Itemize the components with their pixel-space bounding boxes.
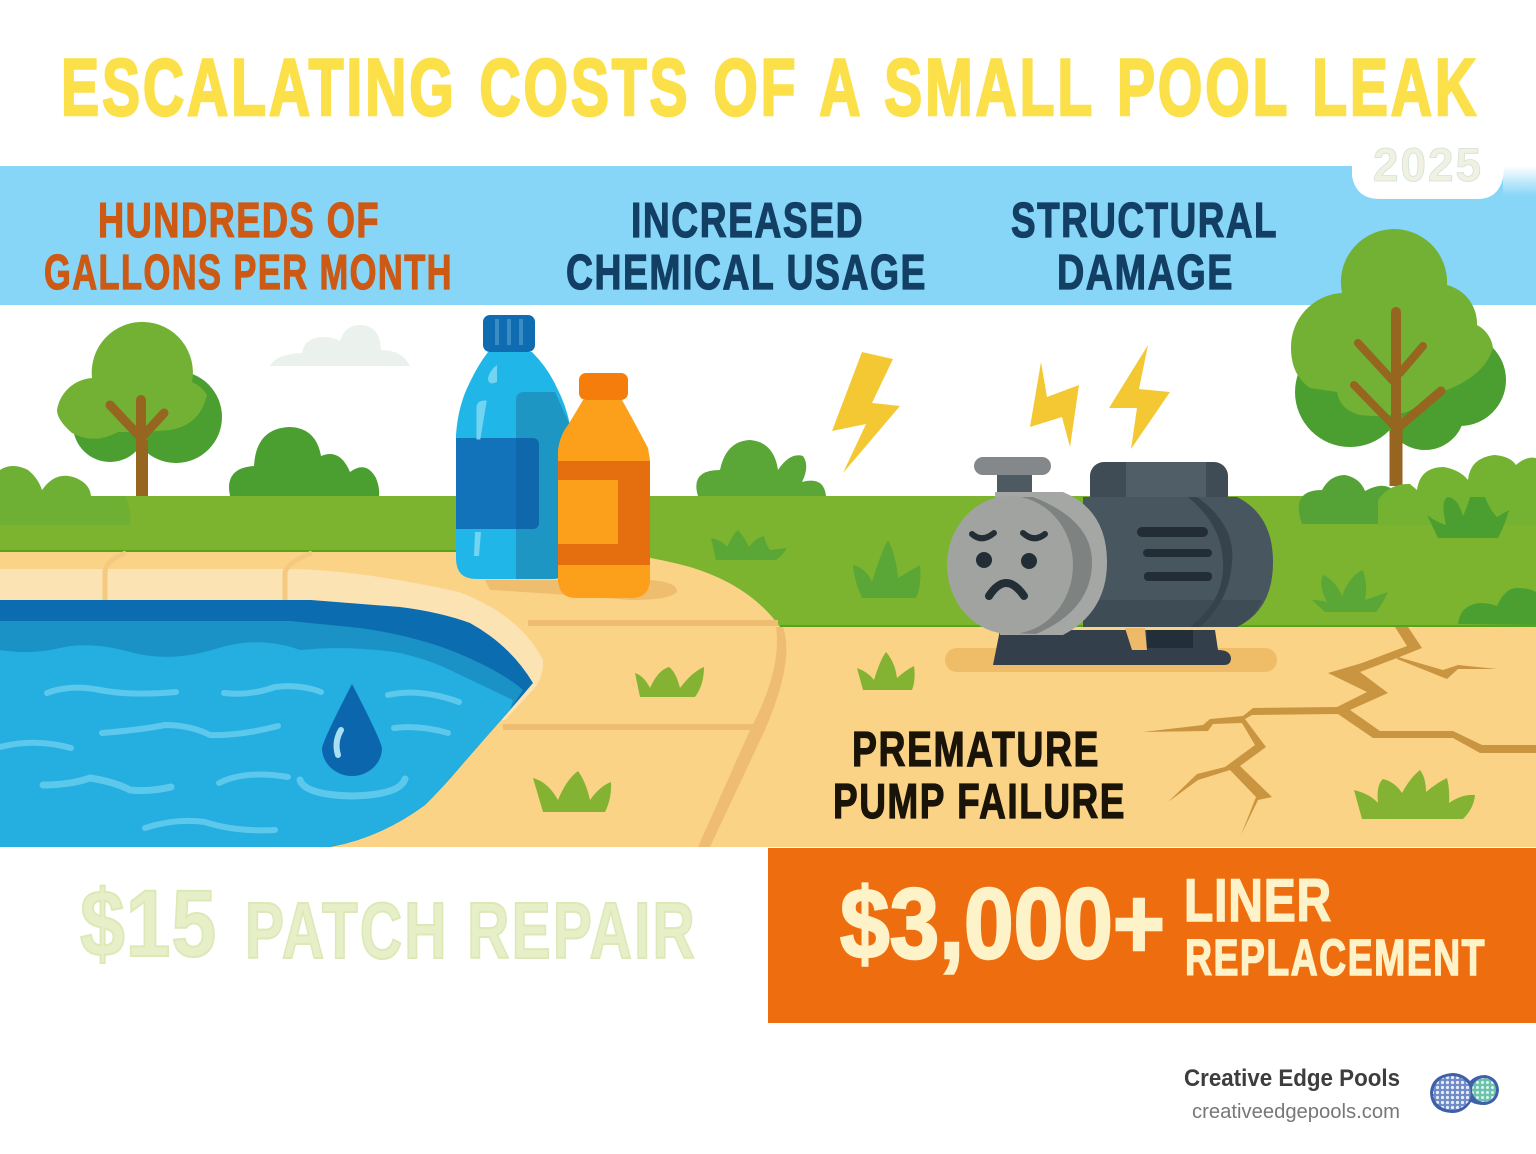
icon: grass tufts — [533, 530, 1536, 819]
year tab — [1352, 138, 1505, 199]
heading: hundreds of gallons — [44, 194, 453, 300]
panel: 3000 dollar liner replacement — [768, 848, 1536, 1023]
heading: increased chemical usage — [566, 194, 927, 300]
panel: 3000 dollar liner replacement: LINER — [1184, 867, 1332, 934]
icon: blue chemical bottle — [456, 315, 570, 579]
heading: structural damage: DAMAGE — [1057, 246, 1234, 300]
icon: lightning bolts over pump — [1030, 345, 1170, 449]
deck: sand ground — [0, 550, 1536, 847]
panel: 3000 dollar liner replacement: $3,000+ — [840, 868, 1165, 980]
tuft: grass back right — [1427, 497, 1509, 538]
icon: bottle shadow — [485, 580, 677, 600]
heading: hundreds of gallons: GALLONS PER MONTH — [44, 246, 453, 300]
icon: brand logo — [1430, 1073, 1499, 1113]
bushes — [0, 427, 1536, 525]
cloud — [270, 325, 410, 366]
tree: right — [1291, 229, 1506, 486]
heading: increased chemical usage: INCREASED — [631, 194, 864, 248]
footer brand text — [1184, 1065, 1400, 1123]
icon: lightning bolt left — [832, 352, 900, 473]
heading: hundreds of gallons: HUNDREDS OF — [98, 194, 380, 248]
icon: sad pool pump — [947, 457, 1273, 665]
footer brand text: Creative Edge Pools — [1184, 1065, 1400, 1092]
year tab: 2025 — [1373, 138, 1483, 191]
callout: 15 dollar patch repair — [80, 871, 697, 977]
pump ground shadow — [945, 648, 1277, 672]
footer brand text: creativeedgepools.com — [1192, 1101, 1400, 1123]
heading: structural damage — [1011, 194, 1278, 300]
callout: 15 dollar patch repair: $15 — [80, 871, 217, 977]
grass field — [0, 496, 1536, 627]
panel: blue header band — [0, 138, 1536, 305]
icon: orange chemical bottle — [558, 373, 650, 598]
heading: increased chemical usage: CHEMICAL USAGE — [566, 246, 927, 300]
callout: 15 dollar patch repair: PATCH REPAIR — [245, 886, 697, 975]
ground cracks — [1143, 627, 1536, 835]
icon: water drop — [322, 684, 382, 776]
heading: structural damage: STRUCTURAL — [1011, 194, 1278, 248]
label: premature pump failure — [833, 723, 1126, 829]
label: premature pump failure: PUMP FAILURE — [833, 775, 1126, 829]
pool — [0, 600, 533, 847]
label: premature pump failure: PREMATURE — [852, 723, 1100, 777]
tree: left — [57, 322, 222, 496]
